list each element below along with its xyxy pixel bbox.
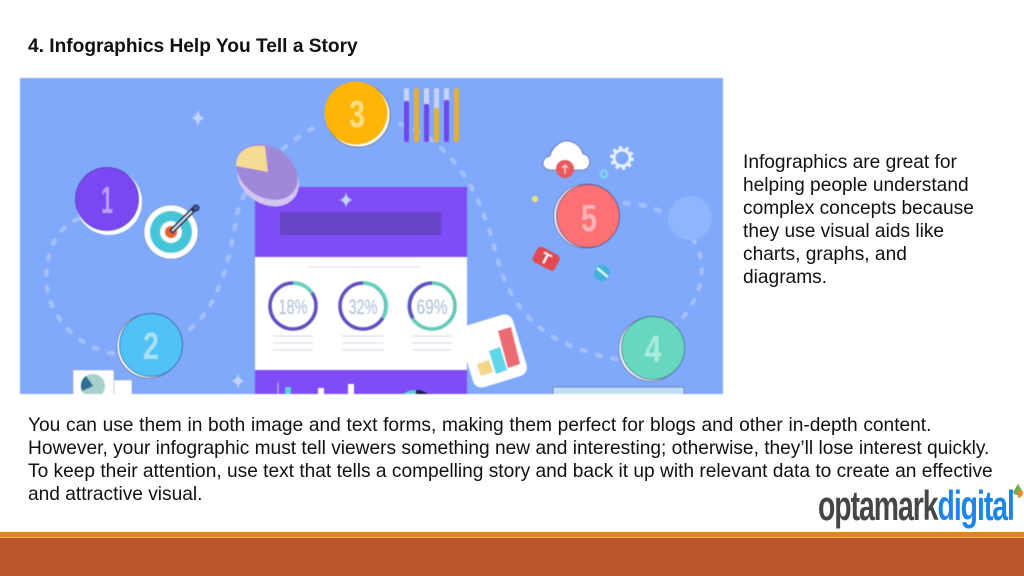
logo xyxy=(818,482,1023,529)
icon: number 1: 1 xyxy=(101,180,113,222)
icon: number 4: 4 xyxy=(644,329,662,371)
side text block: charts, graphs, and xyxy=(743,244,907,265)
donut: 18% xyxy=(270,283,316,329)
side text block: helping people understand xyxy=(743,175,969,196)
icon: gear xyxy=(612,148,632,168)
icon: T tile: T xyxy=(537,250,554,269)
footer bar xyxy=(0,532,1024,576)
icon: number 1 xyxy=(76,168,142,235)
title: 4. Infographics Help You Tell a Story xyxy=(28,36,358,57)
icon: chart tile xyxy=(457,312,529,390)
icon: number 3 xyxy=(324,82,390,147)
dashboard page xyxy=(255,187,467,430)
body text block: To keep their attention, use text that tells a compelling story and back it up with relevant data to create an effective xyxy=(28,461,993,482)
illustration panel xyxy=(19,77,724,395)
icon: documents xyxy=(73,370,132,400)
icon: cloud upload xyxy=(543,141,590,178)
small dots xyxy=(601,171,607,177)
faint circle xyxy=(668,196,712,240)
body text block: You can use them in both image and text forms, making them perfect for blogs and other in-depth content. xyxy=(28,414,931,436)
donut: 69%: 69% xyxy=(416,296,448,319)
icon: number 3: 3 xyxy=(349,94,365,136)
body text block: However, your infographic must tell viewers something new and interesting; otherwise, they’ll lose interest quickly. xyxy=(28,438,989,459)
icon: number 5: 5 xyxy=(581,198,597,240)
icon: bar columns xyxy=(404,88,459,142)
icon: pie chart xyxy=(226,133,310,218)
body text block: and attractive visual. xyxy=(28,484,202,505)
side text block: diagrams. xyxy=(743,267,827,288)
icon: number 2: 2 xyxy=(143,326,159,368)
icon: T tile xyxy=(531,245,561,272)
donut: 32%: 32% xyxy=(348,296,378,319)
side text block: they use visual aids like xyxy=(743,221,944,242)
icon: number 5 xyxy=(554,184,620,248)
side text block: Infographics are great for xyxy=(743,152,957,173)
donut: 69% xyxy=(409,283,455,329)
side text block: complex concepts because xyxy=(743,198,974,219)
donut: 32% xyxy=(340,283,386,329)
lower chart bits xyxy=(277,382,279,394)
donut: 18%: 18% xyxy=(278,296,308,319)
icon: number 4 xyxy=(619,316,684,381)
dashed journey path xyxy=(46,123,702,360)
logo wordmark: optamarkdigital xyxy=(818,482,1014,529)
logo leaf icon xyxy=(1013,484,1023,498)
sparkles xyxy=(191,109,353,389)
icon: small teal ball xyxy=(594,265,610,281)
icon: number 2 xyxy=(117,314,182,378)
footer orange stripe xyxy=(0,532,1024,538)
body text block xyxy=(28,414,993,505)
side text block xyxy=(743,152,974,288)
icon: target with arrow xyxy=(144,205,199,259)
lower right card xyxy=(553,387,684,397)
